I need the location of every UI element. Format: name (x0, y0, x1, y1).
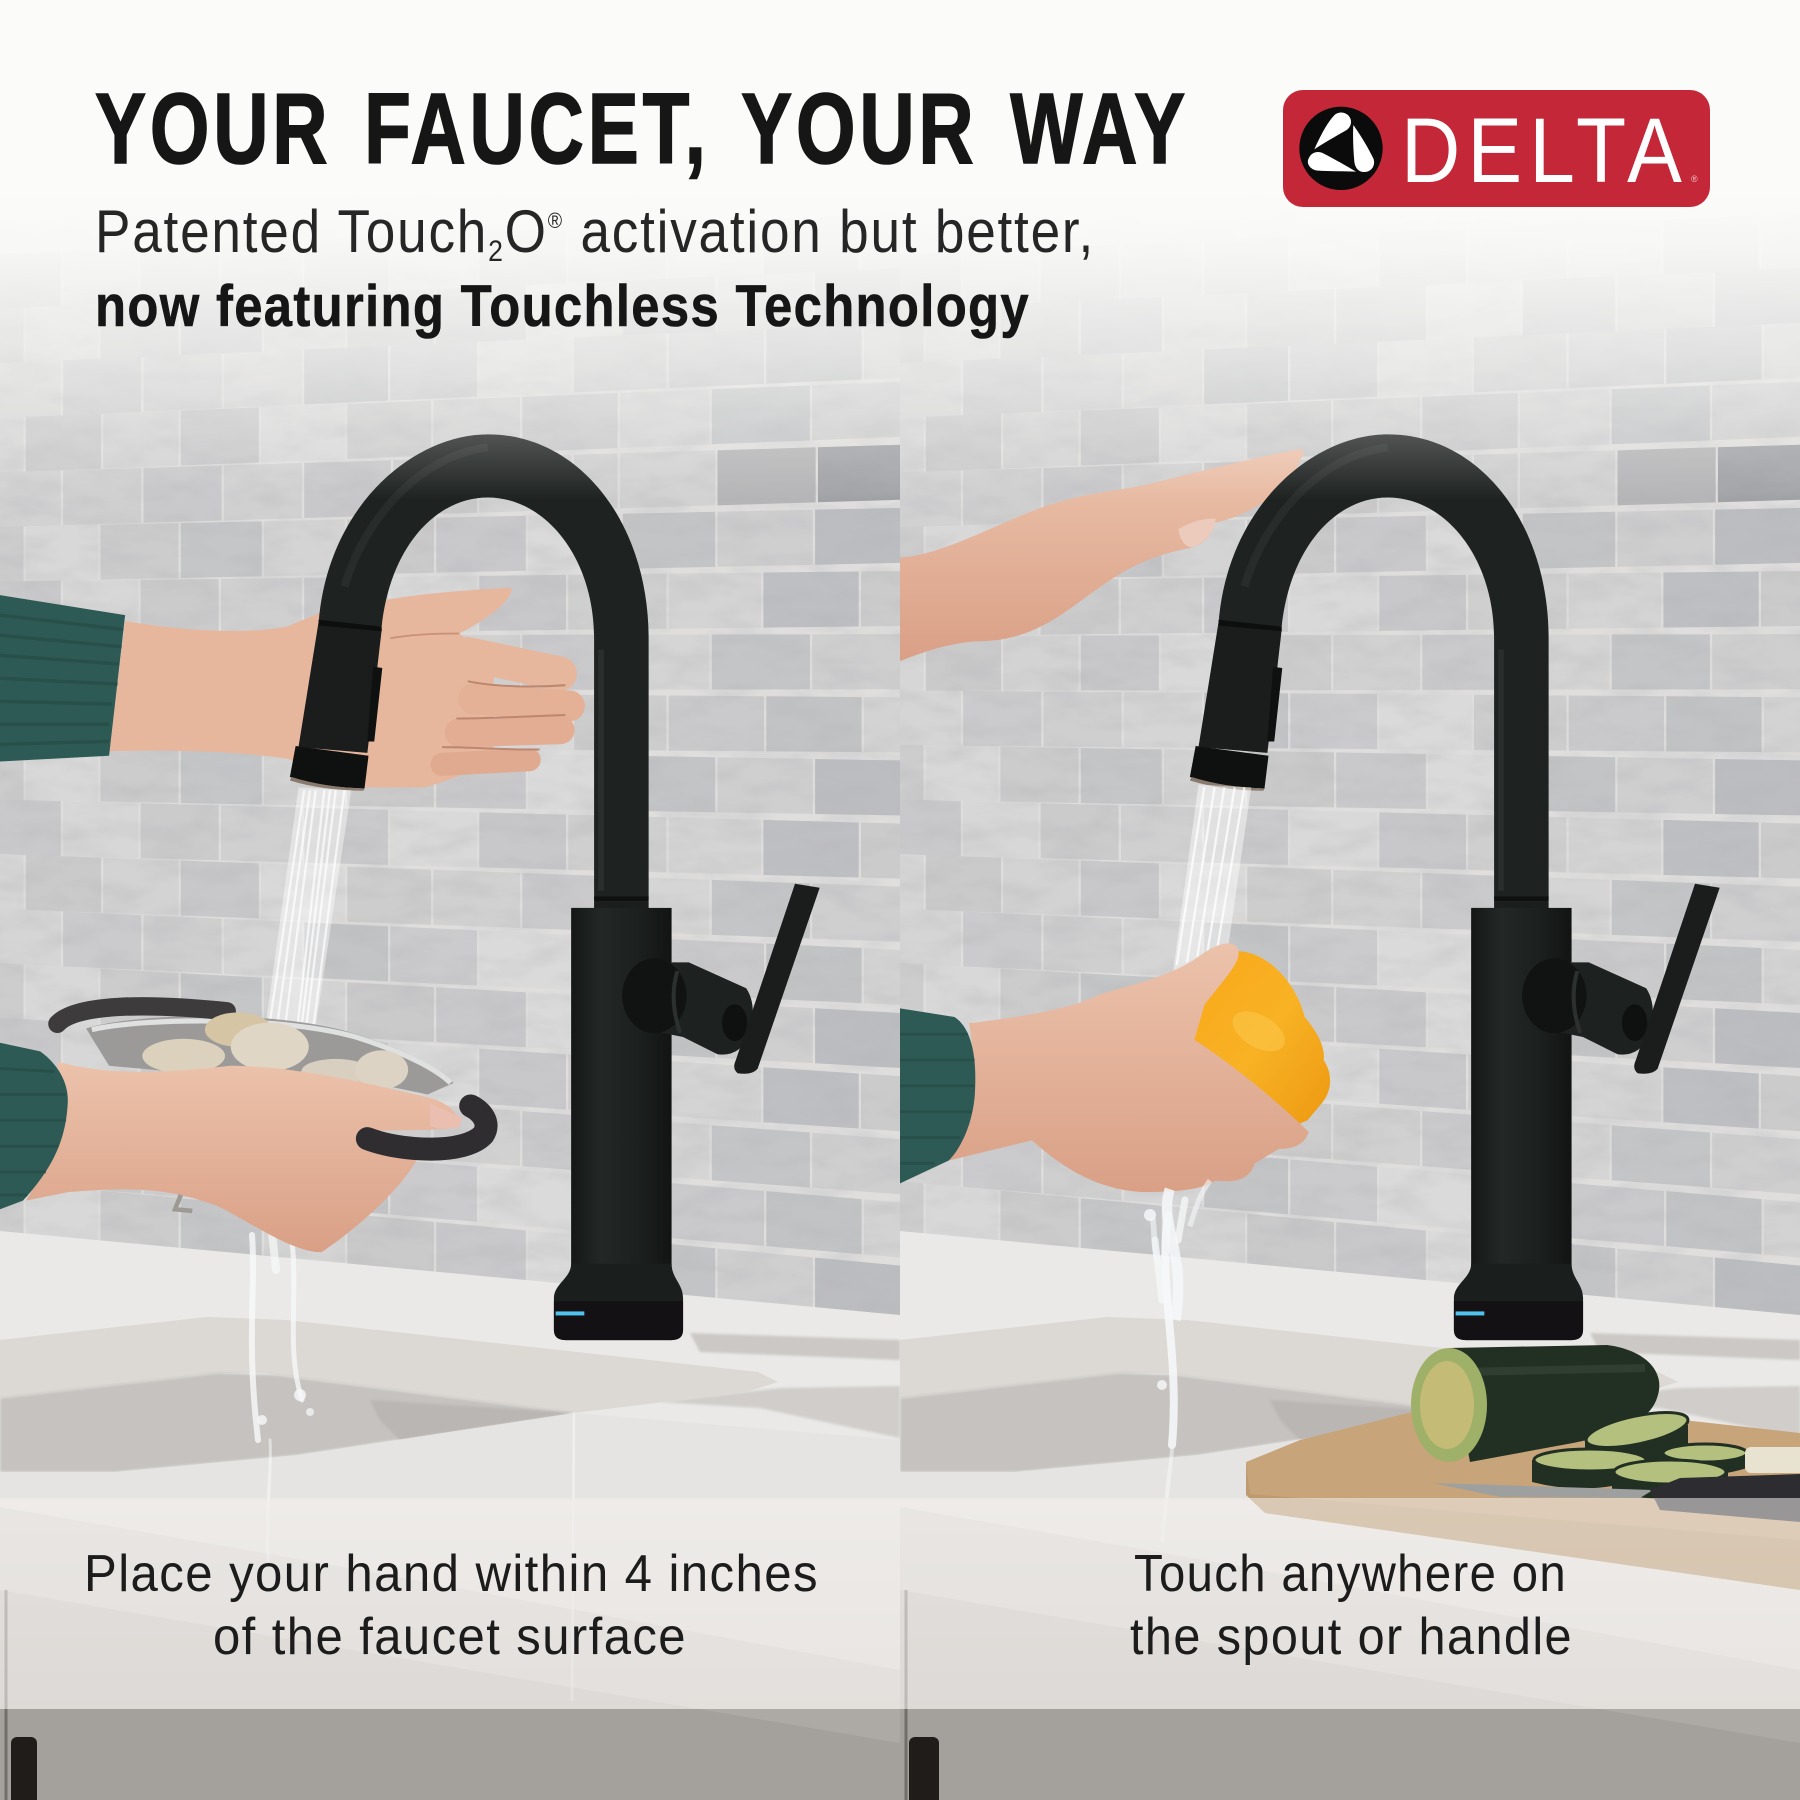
caption left (84, 1545, 819, 1666)
green sleeve upper (0, 595, 125, 762)
marble tile backsplash left (0, 258, 900, 1315)
marble tile backsplash right (900, 258, 1800, 1315)
upper hand touching spout (900, 449, 1303, 661)
top white fade (0, 0, 1800, 500)
cucumber (1411, 1345, 1800, 1499)
bottom dark band (0, 1709, 1800, 1800)
subheading line 1: Patented Touch (95, 198, 539, 265)
upper hand reaching toward spray head (109, 588, 569, 787)
green sleeve right (900, 1008, 975, 1183)
green sleeve lower (0, 1043, 68, 1209)
scene left: hands, faucet, strainer (0, 434, 820, 1340)
kitchen counter and sink right (900, 1231, 1800, 1800)
strainer with mushrooms (57, 1006, 453, 1094)
strainer rubber handle (367, 1106, 486, 1149)
water spray left (265, 787, 351, 1046)
scene right: hands, faucet, pepper (900, 434, 1720, 1340)
caption left: of the faucet surface (213, 1608, 687, 1666)
title: YOUR FAUCET, YOUR WAY (95, 73, 1189, 185)
kitchen counter and sink left (0, 1231, 900, 1800)
cutting board (1246, 1405, 1800, 1590)
lower hand holding strainer (26, 1062, 462, 1252)
caption right (1130, 1545, 1573, 1666)
panel: left photo, hand within 4 inches (0, 258, 900, 1800)
icon: Delta triangle mark (1299, 107, 1383, 190)
logo wordmark: DELTA (1401, 100, 1689, 202)
registered mark: ® (1691, 174, 1698, 184)
subheading line 1: activation but better, (564, 198, 1095, 265)
panel: right photo, touch anywhere (866, 190, 1800, 1800)
subheading line 1: O (505, 198, 548, 265)
kitchen knife (1433, 1474, 1800, 1522)
black faucet left (290, 434, 820, 1340)
caption left: Place your hand within 4 inches (84, 1545, 819, 1603)
water falling into sink right (1144, 1200, 1185, 1540)
subheading line 2: now featuring Touchless Technology (95, 274, 1030, 339)
yellow pepper (1194, 951, 1330, 1124)
logo: Delta (1283, 90, 1710, 207)
caption right: Touch anywhere on (1134, 1545, 1567, 1603)
water drops under hand right (1153, 1181, 1210, 1320)
black faucet right (1190, 434, 1720, 1340)
water spray right (1173, 784, 1251, 971)
lower hand holding pepper (949, 943, 1309, 1192)
subheading line 1: ® (548, 208, 564, 233)
subheading line 1: 2 (488, 235, 505, 268)
cabinet handle right (909, 1737, 939, 1800)
caption band (0, 1498, 1800, 1709)
caption right: the spout or handle (1130, 1608, 1573, 1666)
water falling into sink left (252, 1232, 574, 1700)
